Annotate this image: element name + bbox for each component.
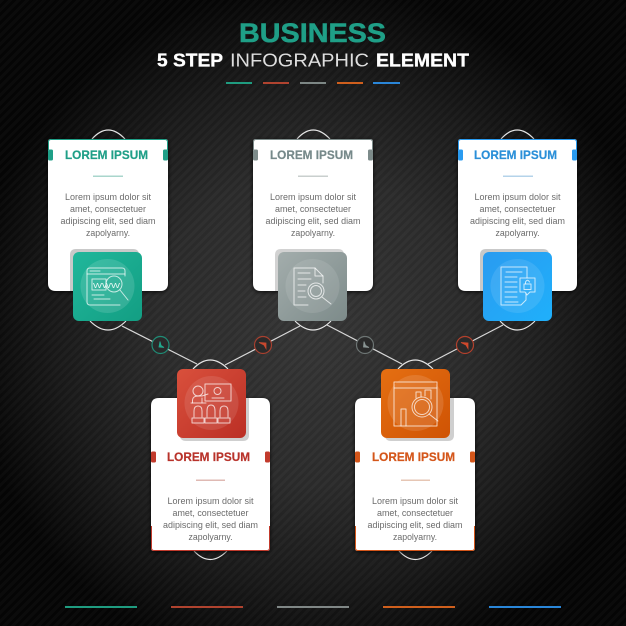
body text: amet, consectetuer: [275, 204, 351, 214]
icon: www search: WWW: [93, 283, 121, 290]
icon: chart search: [381, 369, 450, 438]
connector lines: [122, 325, 503, 365]
card body: [253, 139, 373, 291]
body text: amet, consectetuer: [172, 508, 248, 518]
body text: zapolyarny.: [496, 228, 540, 238]
icon: www search: [73, 252, 142, 321]
card body: [458, 139, 577, 291]
body text: [266, 192, 360, 238]
body text: adipiscing elit, sed diam: [163, 520, 258, 530]
subtitle: 5 step infographic element: 5 STEP: [157, 50, 223, 70]
body text: adipiscing elit, sed diam: [368, 520, 462, 530]
heading: LOREM IPSUM: [270, 150, 353, 162]
body text: zapolyarny.: [188, 532, 232, 542]
body text: [60, 192, 156, 238]
body text: zapolyarny.: [86, 228, 130, 238]
panel: step 4 red: [151, 369, 270, 551]
body text: [368, 496, 462, 542]
card body: [355, 398, 475, 551]
footer colour lines: [65, 606, 561, 608]
node: green arrow: [152, 336, 169, 354]
node: red arrow: [254, 336, 272, 354]
header colour dashes: [226, 82, 400, 84]
panel: step 1 green: [48, 139, 168, 321]
node: grey arrow: [356, 336, 374, 354]
body text: adipiscing elit, sed diam: [266, 216, 360, 226]
body text: Lorem ipsum dolor sit: [474, 192, 561, 202]
body text: [163, 496, 258, 542]
card body: [151, 398, 270, 551]
heading: LOREM IPSUM: [474, 150, 557, 162]
body text: adipiscing elit, sed diam: [470, 216, 565, 226]
icon: document search: [278, 252, 347, 321]
subtitle: 5 step infographic element: ELEMENT: [376, 50, 470, 70]
heading: LOREM IPSUM: [372, 452, 455, 464]
panel: step 2 grey: [253, 139, 373, 321]
body text: zapolyarny.: [291, 228, 335, 238]
body text: Lorem ipsum dolor sit: [372, 496, 458, 506]
icon: presentation: [177, 369, 246, 438]
panel: step 5 orange: [355, 369, 475, 551]
arcs behind cards: [90, 130, 535, 560]
subtitle: 5 step infographic element: [157, 50, 470, 70]
panel: step 3 blue: [458, 139, 577, 321]
card body: [48, 139, 168, 291]
heading: LOREM IPSUM: [167, 452, 250, 464]
body text: adipiscing elit, sed diam: [60, 216, 156, 226]
heading: LOREM IPSUM: [65, 150, 148, 162]
body text: amet, consectetuer: [480, 204, 556, 214]
subtitle: 5 step infographic element: INFOGRAPHIC: [230, 50, 369, 70]
body text: amet, consectetuer: [70, 204, 146, 214]
node: orange-red arrow: [456, 336, 474, 354]
body text: Lorem ipsum dolor sit: [65, 192, 151, 202]
icon: document lock: [483, 252, 552, 321]
body text: Lorem ipsum dolor sit: [270, 192, 356, 202]
body text: [470, 192, 565, 238]
body text: zapolyarny.: [393, 532, 437, 542]
body text: amet, consectetuer: [377, 508, 453, 518]
title: BUSINESS: BUSINESS: [239, 18, 386, 48]
body text: Lorem ipsum dolor sit: [168, 496, 254, 506]
